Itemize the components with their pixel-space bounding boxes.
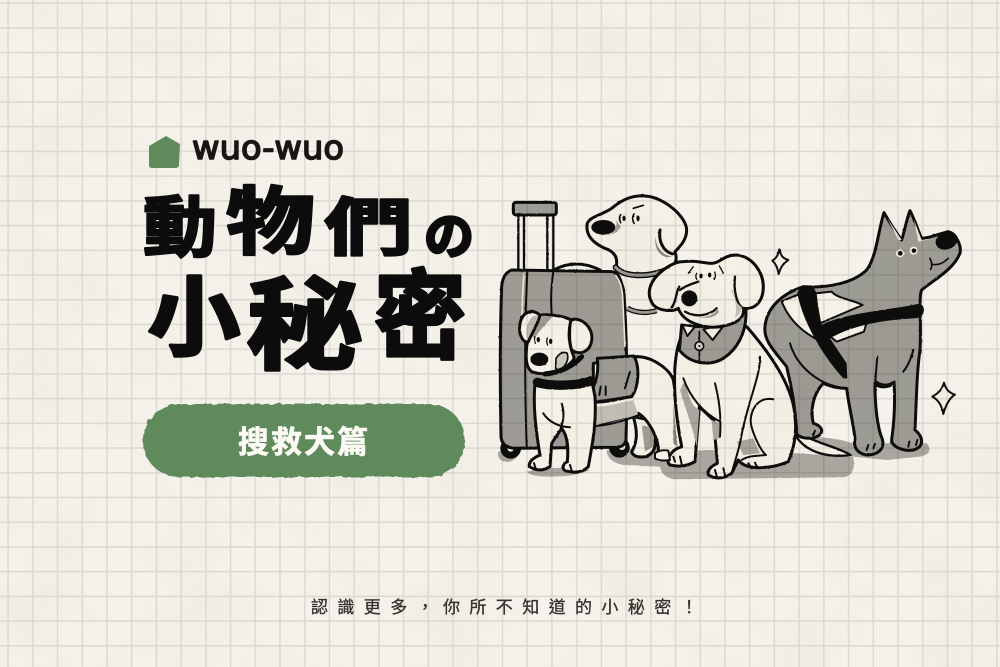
belly shadow — [680, 380, 760, 455]
sparkle small — [772, 249, 788, 274]
suitcase wheels — [500, 437, 630, 459]
snout — [930, 229, 960, 269]
icon: green house — [149, 136, 180, 168]
pill text: 搜救犬篇 — [238, 425, 370, 460]
dog: small dog with vest — [520, 311, 687, 472]
legs and chest — [529, 380, 595, 472]
body lines — [673, 357, 773, 476]
left ear — [520, 311, 540, 342]
bandana — [679, 311, 746, 363]
title line 1: 們 — [324, 193, 413, 264]
ground shadows — [498, 437, 930, 479]
tail — [797, 435, 851, 456]
title line 2: 密 — [374, 264, 466, 371]
ear highlights — [887, 218, 933, 242]
nose and eyes — [530, 337, 552, 366]
eyes — [688, 266, 723, 279]
title line 2: 小 — [148, 271, 240, 366]
dog: sitting white dog with bandana — [649, 255, 796, 478]
leg lines — [790, 343, 917, 450]
head — [526, 315, 574, 374]
body — [590, 357, 687, 463]
title line 2: 秘 — [246, 271, 363, 383]
suitcase back handle — [555, 264, 600, 270]
harness — [797, 286, 924, 378]
body — [765, 211, 960, 455]
vest — [593, 356, 638, 402]
body — [668, 327, 796, 478]
title line 2 — [148, 264, 466, 383]
logo — [149, 128, 344, 168]
suitcase handle — [513, 202, 556, 269]
title line 1 — [143, 182, 474, 265]
collar — [545, 357, 582, 374]
collar — [616, 267, 667, 275]
ear — [660, 230, 673, 254]
title line 1: 物 — [226, 182, 315, 264]
suitcase ribs — [525, 272, 553, 447]
strap — [627, 308, 657, 312]
dog: grey dog with harness — [765, 211, 960, 456]
hind leg — [632, 417, 655, 457]
nose and mouth — [681, 290, 719, 318]
tongue — [556, 352, 568, 370]
title line 1: 動 — [143, 190, 217, 265]
green pill badge — [143, 404, 465, 477]
title — [143, 182, 474, 383]
suitcase body — [500, 270, 627, 448]
sparkle large — [932, 383, 955, 414]
right ear — [570, 319, 592, 353]
illustration: search and rescue dogs — [498, 196, 960, 479]
body — [587, 196, 687, 313]
pill shape — [143, 404, 465, 477]
head and ears — [649, 255, 763, 327]
white saddle — [782, 292, 867, 342]
eyes — [619, 205, 643, 223]
brand name: wuo-wuo — [192, 128, 344, 167]
suitcase — [500, 202, 630, 459]
title line 1: の — [424, 209, 474, 265]
nose — [591, 220, 615, 235]
dog: white dog behind suitcase — [587, 196, 687, 313]
eyes — [896, 247, 918, 257]
footer tagline: 認識更多，你所不知道的小秘密！ — [311, 598, 707, 617]
